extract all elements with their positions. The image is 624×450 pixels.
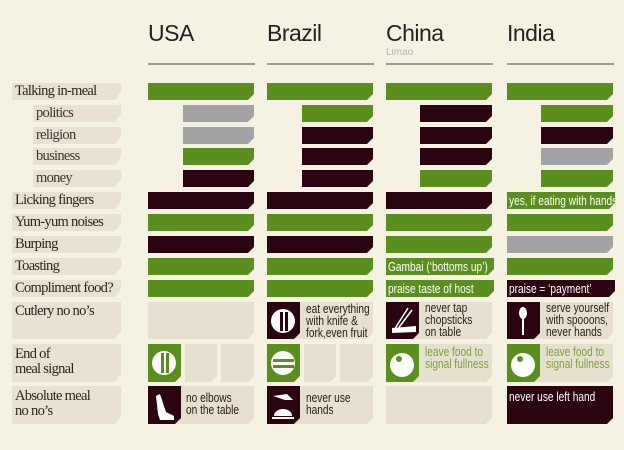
label: Toasting (12, 258, 121, 275)
text: never use hands (306, 390, 351, 417)
icon: knife & fork (267, 302, 300, 339)
text: no elbows: on the table (186, 402, 239, 417)
label: Burping (12, 236, 121, 253)
icon: elbow (148, 386, 181, 424)
column: USA (148, 83, 254, 424)
label: Toasting: Toasting (15, 258, 59, 274)
text: eat everything: fork,even fruit (306, 325, 367, 340)
text: serve yourself (546, 300, 610, 339)
text: never use hands: never use (306, 390, 351, 405)
bar: praise taste of host: praise taste of host (388, 281, 474, 296)
bar: praise = payment (507, 280, 615, 297)
icon: leftover plate (386, 344, 419, 382)
text: leave food (546, 344, 610, 371)
label: Cutlery no no's (12, 302, 121, 339)
header: India: India (507, 20, 554, 46)
text: leave food: signal fullness (425, 356, 489, 371)
text: leave food (425, 344, 489, 371)
label: politics (33, 105, 121, 122)
label: End of meal signal (12, 344, 121, 382)
label: Licking fingers: Licking fingers (15, 192, 94, 208)
icon: hand over food (267, 386, 300, 424)
label: religion (33, 127, 121, 144)
label: Yum-yum noises: Yum-yum noises (15, 214, 103, 230)
label: Talking in-meal: Talking in-meal (15, 83, 96, 99)
bar: praise taste of host (386, 280, 494, 297)
label: Compliment food?: Compliment food? (15, 280, 113, 296)
column: China (386, 83, 494, 424)
bar: praise = payment: praise = ‘payment’ (509, 281, 592, 296)
text: never tap chopsticks: never tap (425, 300, 467, 315)
icon: plate (green) (267, 344, 300, 382)
text: never tap chopsticks (425, 300, 472, 339)
text: leave food: signal fullness (546, 356, 610, 371)
header: China: China (386, 20, 444, 46)
text: leave food: leave food to (546, 344, 604, 359)
subtitle: Limao: Limao (386, 47, 413, 58)
column: Brazil (267, 83, 373, 424)
text: leave food: leave food to (425, 344, 483, 359)
icon: chopsticks (386, 302, 419, 339)
text: serve yourself: serve yourself (546, 300, 609, 315)
label: Absolute meal no no's (12, 386, 121, 424)
label: Absolute meal no no's: no no’s (15, 403, 52, 419)
label: politics: politics (36, 105, 73, 121)
text: eat everything (306, 301, 370, 340)
label: business (33, 148, 121, 165)
header: Brazil: Brazil (267, 20, 322, 46)
bar: yes, if eating with hands: yes, if eating with hands (509, 193, 617, 208)
label: End of meal signal: End of (15, 346, 50, 362)
header: USA: USA (148, 20, 194, 46)
text: never tap chopsticks: chopsticks (425, 312, 472, 327)
label: money: money (36, 170, 72, 186)
row labels (12, 83, 121, 424)
label: religion: religion (36, 127, 76, 143)
label: End of meal signal: meal signal (15, 361, 74, 377)
label: money (33, 170, 121, 187)
label: Burping: Burping (15, 236, 58, 252)
text: eat everything: with knife & (306, 313, 358, 328)
icon: spoon (507, 302, 540, 339)
label: Absolute meal no no's: Absolute meal (15, 388, 90, 404)
text: eat everything: eat everything (306, 301, 370, 316)
label: Licking fingers (12, 192, 121, 209)
bar: never use left hand: never use left hand (509, 389, 595, 404)
text: never use hands: hands (306, 402, 334, 417)
icon: leftover plate (507, 344, 540, 382)
bar: Gambai: Gambai (‘bottoms up’) (388, 259, 488, 274)
bar: never use left hand (507, 386, 613, 424)
text: no elbows (186, 390, 239, 417)
text: serve yourself: with spooons, (546, 312, 608, 327)
text: serve yourself: never hands (546, 324, 602, 339)
text: no elbows: no elbows (186, 390, 232, 405)
label: Cutlery no no's: Cutlery no no’s (15, 303, 94, 319)
column: India (507, 83, 615, 424)
text: never tap chopsticks: on table (425, 324, 461, 339)
label: business: business (36, 148, 80, 164)
icon: plate with cutlery (green) (148, 344, 181, 382)
